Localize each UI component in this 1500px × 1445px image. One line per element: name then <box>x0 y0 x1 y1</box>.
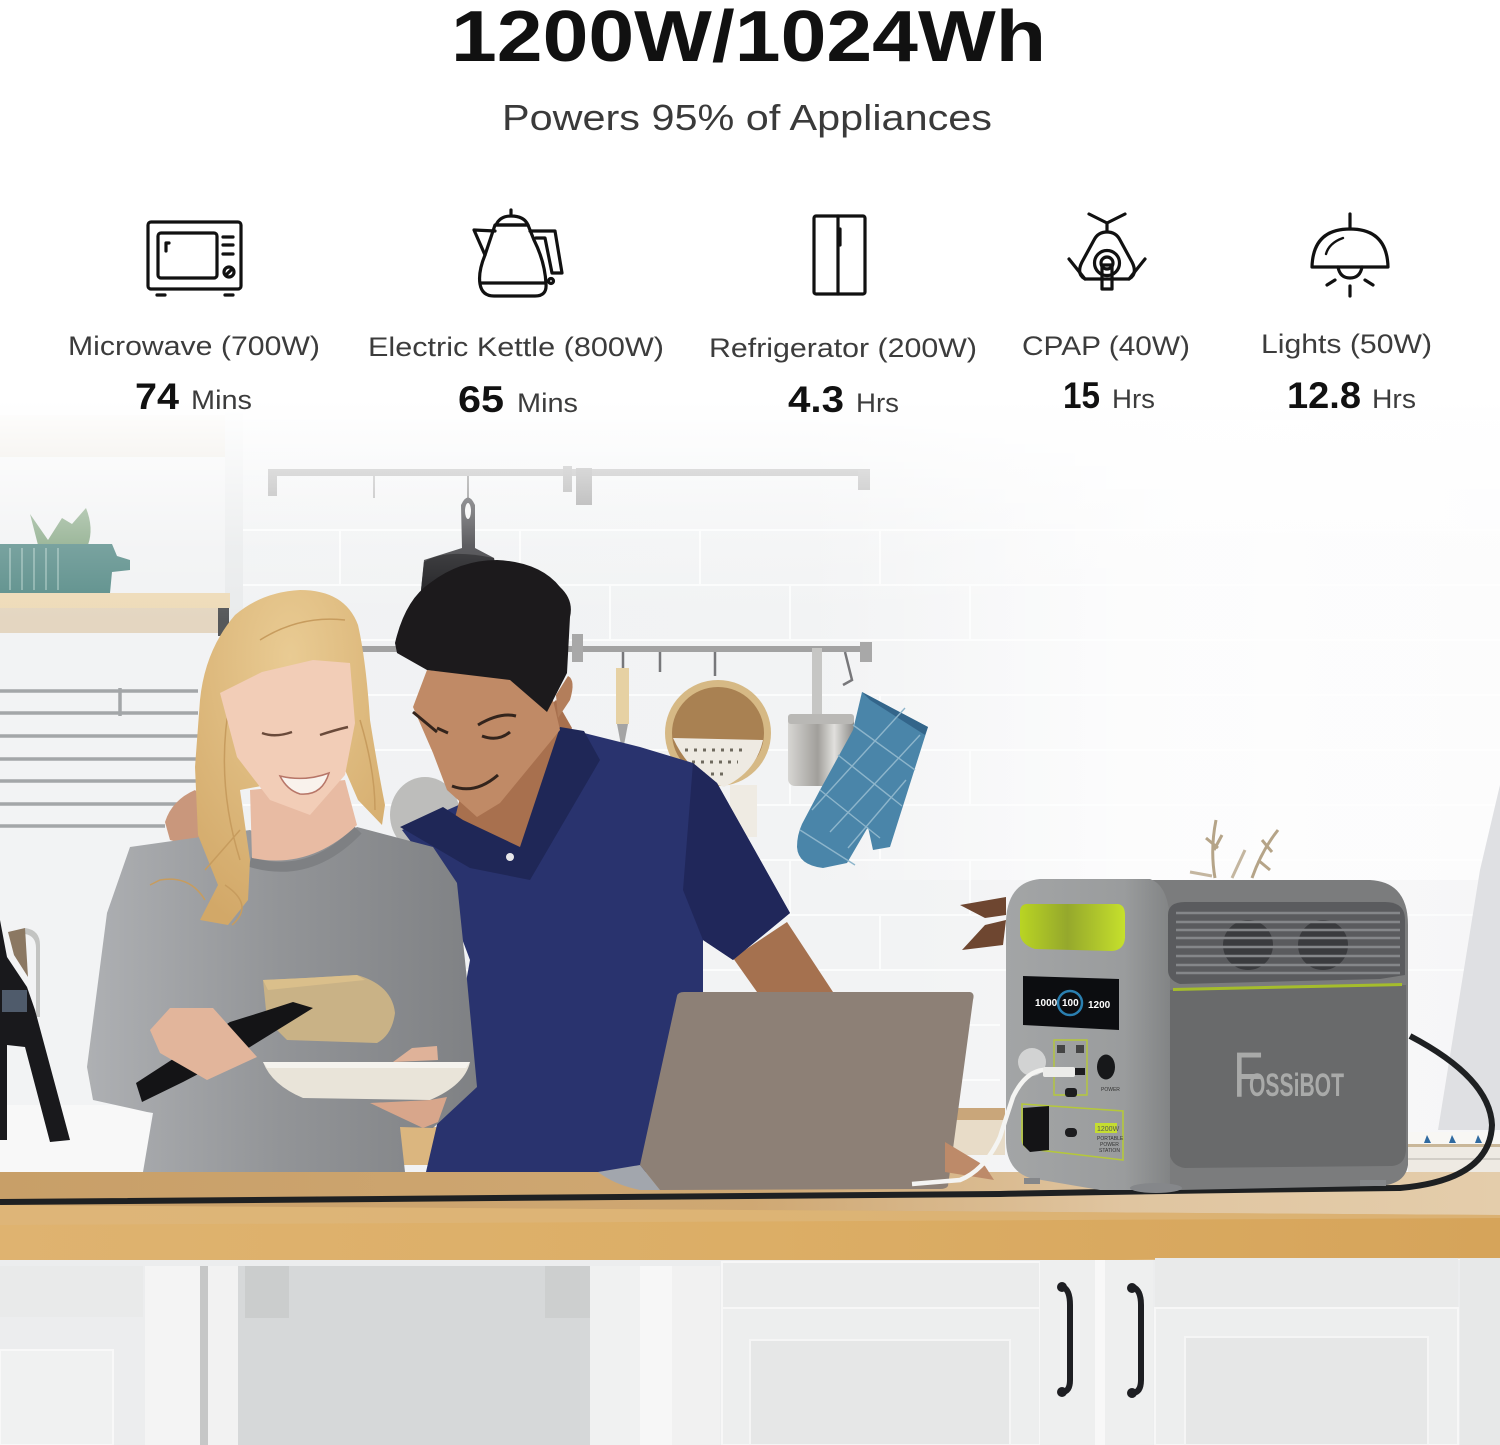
woman smile <box>280 773 329 794</box>
item: CPAP <box>1022 214 1190 416</box>
shelf with pot and plant <box>0 508 230 636</box>
hair strands <box>150 619 375 925</box>
item: kettle <box>368 210 664 420</box>
label: Lights (50W) <box>1261 329 1432 359</box>
right door <box>1155 1258 1458 1308</box>
icon: pendant lamp <box>1312 214 1388 296</box>
runtime: Hrs <box>1372 384 1416 414</box>
polo button <box>506 853 514 861</box>
label: Electric Kettle (800W) <box>368 332 664 362</box>
left door <box>0 1266 143 1317</box>
woman face <box>220 660 355 815</box>
front panel <box>1006 879 1170 1190</box>
runtime: Hrs <box>856 388 899 418</box>
lower panel with outlet <box>1022 1104 1124 1160</box>
runtime: 4.3 <box>788 379 844 420</box>
ports: POWER <box>1101 1087 1120 1093</box>
black power cord <box>0 1036 1492 1202</box>
woman neck <box>250 780 357 861</box>
narrow doors <box>1040 1260 1095 1445</box>
lower rail with hooks <box>360 634 872 745</box>
wall tiles <box>243 530 1500 1080</box>
wall rack <box>0 688 198 826</box>
coffee machine <box>0 920 70 1142</box>
label: Refrigerator (200W) <box>709 333 977 363</box>
icon: CPAP mask <box>1069 214 1145 289</box>
item: refrigerator <box>709 216 977 420</box>
hanging pan <box>420 476 500 600</box>
woven basket <box>665 680 771 837</box>
right pale panel <box>1438 785 1500 1130</box>
runtime: Mins <box>517 388 578 418</box>
icon: microwave <box>148 222 241 295</box>
laptop <box>598 992 974 1190</box>
white charging cable <box>912 1067 1075 1184</box>
runtime <box>788 379 899 420</box>
blue oven mitt <box>797 692 928 868</box>
man ear <box>556 676 573 718</box>
sleeve shading <box>683 763 790 960</box>
upper rail <box>268 466 870 505</box>
runtime <box>1287 375 1416 416</box>
green handle <box>1020 904 1125 951</box>
dried plant <box>1190 820 1278 878</box>
lower panel with outlet: STATION <box>1099 1148 1120 1154</box>
right wall brightening <box>800 420 1500 880</box>
rubber feet <box>1024 1178 1386 1193</box>
tongs <box>136 1002 313 1102</box>
stacked plates right <box>1408 1132 1500 1172</box>
lower panel with outlet: PORTABLE <box>1097 1136 1124 1142</box>
hand on shoulder <box>165 790 205 850</box>
power station <box>1006 879 1408 1193</box>
runtime: 65 <box>458 379 504 420</box>
side panel <box>1130 880 1408 1190</box>
man neck <box>455 700 572 848</box>
woman hair back <box>195 590 385 925</box>
man arm <box>733 922 833 992</box>
lower panel with outlet: POWER <box>1100 1142 1119 1148</box>
runtime: 74 <box>135 376 179 417</box>
plate with bread and tongs <box>136 975 470 1128</box>
door handles <box>1057 1282 1141 1398</box>
hand on counter <box>945 1142 994 1180</box>
wooden counter <box>0 1172 1500 1266</box>
item: microwave <box>68 222 320 417</box>
steel bowl behind <box>390 777 460 853</box>
runtime: Hrs <box>1112 384 1155 414</box>
subtitle: Powers 95% of Appliances <box>502 97 992 138</box>
label: CPAP (40W) <box>1022 331 1190 361</box>
icon: refrigerator <box>814 216 865 294</box>
lower panel with outlet: 1200W <box>1097 1126 1120 1133</box>
runtime: 15 <box>1063 375 1100 416</box>
LCD display <box>1023 976 1119 1030</box>
ports <box>1018 1040 1120 1097</box>
runtime <box>135 376 252 417</box>
brand logo: OSSiBOT <box>1249 1067 1344 1103</box>
center door <box>722 1262 1040 1445</box>
runtime: 12.8 <box>1287 375 1361 416</box>
man <box>390 560 833 1172</box>
lower cabinets <box>0 1258 1500 1445</box>
woman sweater <box>87 827 477 1172</box>
dried leaves <box>960 897 1006 950</box>
tongs hand <box>150 1008 257 1080</box>
man face <box>413 670 560 817</box>
lower side panel <box>1168 985 1406 1168</box>
runtime: Mins <box>191 385 252 415</box>
man hair <box>395 560 571 712</box>
woman <box>87 590 477 1172</box>
icon: kettle <box>474 210 562 296</box>
steel cup <box>788 648 854 786</box>
plate <box>263 1062 470 1100</box>
green stripe <box>1173 983 1402 991</box>
LCD display: 1000 <box>1035 998 1058 1009</box>
holding hand <box>370 1097 447 1128</box>
brand logo: F <box>1233 1039 1263 1111</box>
runtime <box>1063 375 1155 416</box>
woman eyes <box>262 727 348 735</box>
open center recess <box>238 1266 590 1445</box>
left cabinet <box>0 410 243 1182</box>
item: lights <box>1261 214 1432 416</box>
bread <box>263 975 395 1043</box>
vent <box>1168 902 1405 984</box>
LCD display: 100 <box>1062 998 1079 1009</box>
sweater neckline <box>250 830 358 867</box>
runtime <box>458 379 578 420</box>
LCD display: 1200 <box>1088 1000 1111 1011</box>
man collar <box>400 727 600 880</box>
brand logo <box>1233 1039 1344 1111</box>
wood boards behind <box>400 1108 1005 1165</box>
man polo shirt <box>402 727 790 1172</box>
label: Microwave (700W) <box>68 331 320 361</box>
man brows and smile <box>413 712 516 789</box>
plate fingers <box>393 1046 438 1062</box>
white fade toward the top <box>0 0 1500 620</box>
